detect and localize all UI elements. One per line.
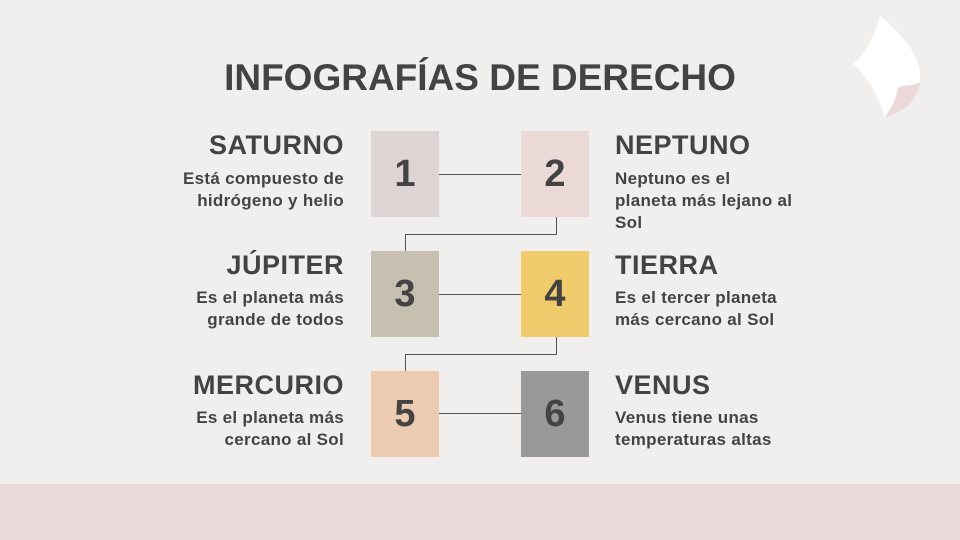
text: más cercano al Sol <box>615 310 774 329</box>
title: INFOGRAFÍAS DE DERECHO <box>224 57 736 98</box>
venus: VENUS <box>615 370 711 400</box>
jupiter: JÚPITER <box>226 250 344 280</box>
box 5 <box>371 371 439 457</box>
box 1: 1 <box>394 152 416 194</box>
text: temperaturas altas <box>615 430 772 449</box>
box 6 <box>521 371 589 457</box>
mercurio: MERCURIO <box>193 370 344 400</box>
text: cercano al Sol <box>225 430 344 449</box>
saturno: SATURNO <box>209 130 344 160</box>
text: Venus tiene unas <box>615 408 759 427</box>
text: grande de todos <box>207 310 344 329</box>
text: Sol <box>615 213 642 232</box>
icon: leaf <box>854 16 920 117</box>
text: Está compuesto de <box>183 169 344 188</box>
connectors <box>439 174 521 175</box>
box 4 <box>521 251 589 337</box>
box 4: 4 <box>544 272 566 314</box>
neptuno: NEPTUNO <box>615 130 751 160</box>
box 5: 5 <box>394 392 416 434</box>
bottom band <box>0 484 960 540</box>
box 3 <box>371 251 439 337</box>
box 6: 6 <box>544 392 566 434</box>
text: Es el planeta más <box>196 288 344 307</box>
text: Es el tercer planeta <box>615 288 777 307</box>
text: Neptuno es el <box>615 169 730 188</box>
text: hidrógeno y helio <box>197 191 344 210</box>
text: planeta más lejano al <box>615 191 792 210</box>
box 2 <box>521 131 589 217</box>
box 1 <box>371 131 439 217</box>
box 2: 2 <box>544 152 566 194</box>
tierra: TIERRA <box>615 250 718 280</box>
box 3: 3 <box>394 272 416 314</box>
text: Es el planeta más <box>196 408 344 427</box>
